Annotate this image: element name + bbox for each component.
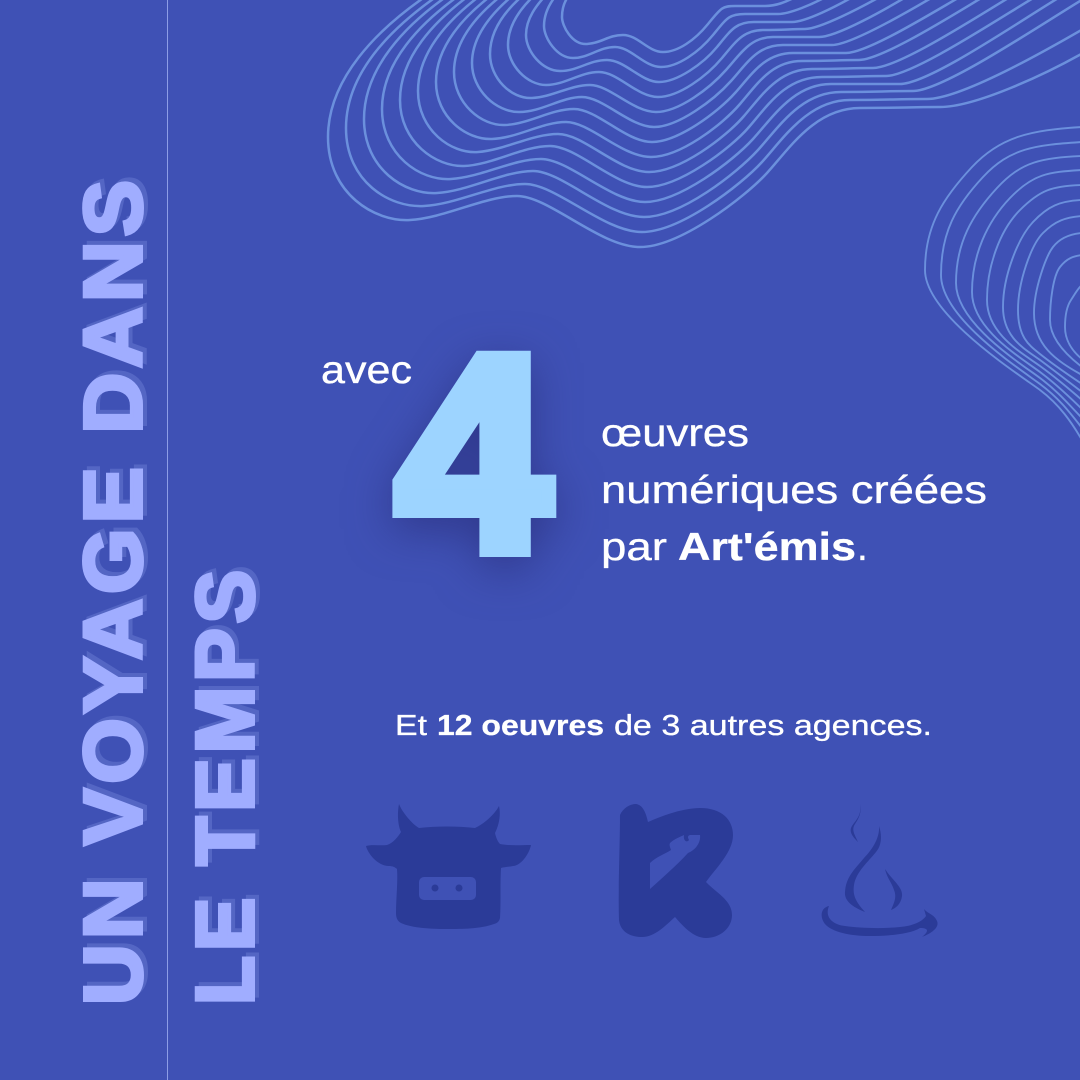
icon: steaming dish logo	[822, 804, 938, 937]
icon: cow logo	[366, 804, 531, 929]
icon: letter R logo	[619, 804, 733, 938]
text: oeuvres numeriques creees par Art'emis: Art'émis	[678, 526, 856, 569]
text: et 12 oeuvres de 3 autres agences: Et	[395, 710, 427, 742]
vertical title: LE TEMPS	[180, 565, 271, 1005]
top wave contour lines	[328, 0, 1080, 247]
vertical title: UN VOYAGE DANS	[68, 175, 159, 1005]
text: oeuvres numeriques creees par Art'emis: .	[857, 526, 868, 569]
text: et 12 oeuvres de 3 autres agences: 12 oeuvres	[437, 710, 604, 742]
big number 4: 4	[396, 298, 552, 608]
text: oeuvres numeriques creees par Art'emis	[601, 412, 987, 569]
sidebar divider line	[167, 0, 168, 1080]
text: oeuvres numeriques creees par Art'emis: numériques créées	[601, 469, 987, 512]
text: oeuvres numeriques creees par Art'emis: par	[601, 526, 667, 569]
text: oeuvres numeriques creees par Art'emis: œuvres	[601, 412, 749, 455]
right wave contour lines	[925, 127, 1080, 440]
text: avec: avec	[321, 349, 412, 392]
text: et 12 oeuvres de 3 autres agences: de 3 autres agences.	[614, 710, 932, 742]
